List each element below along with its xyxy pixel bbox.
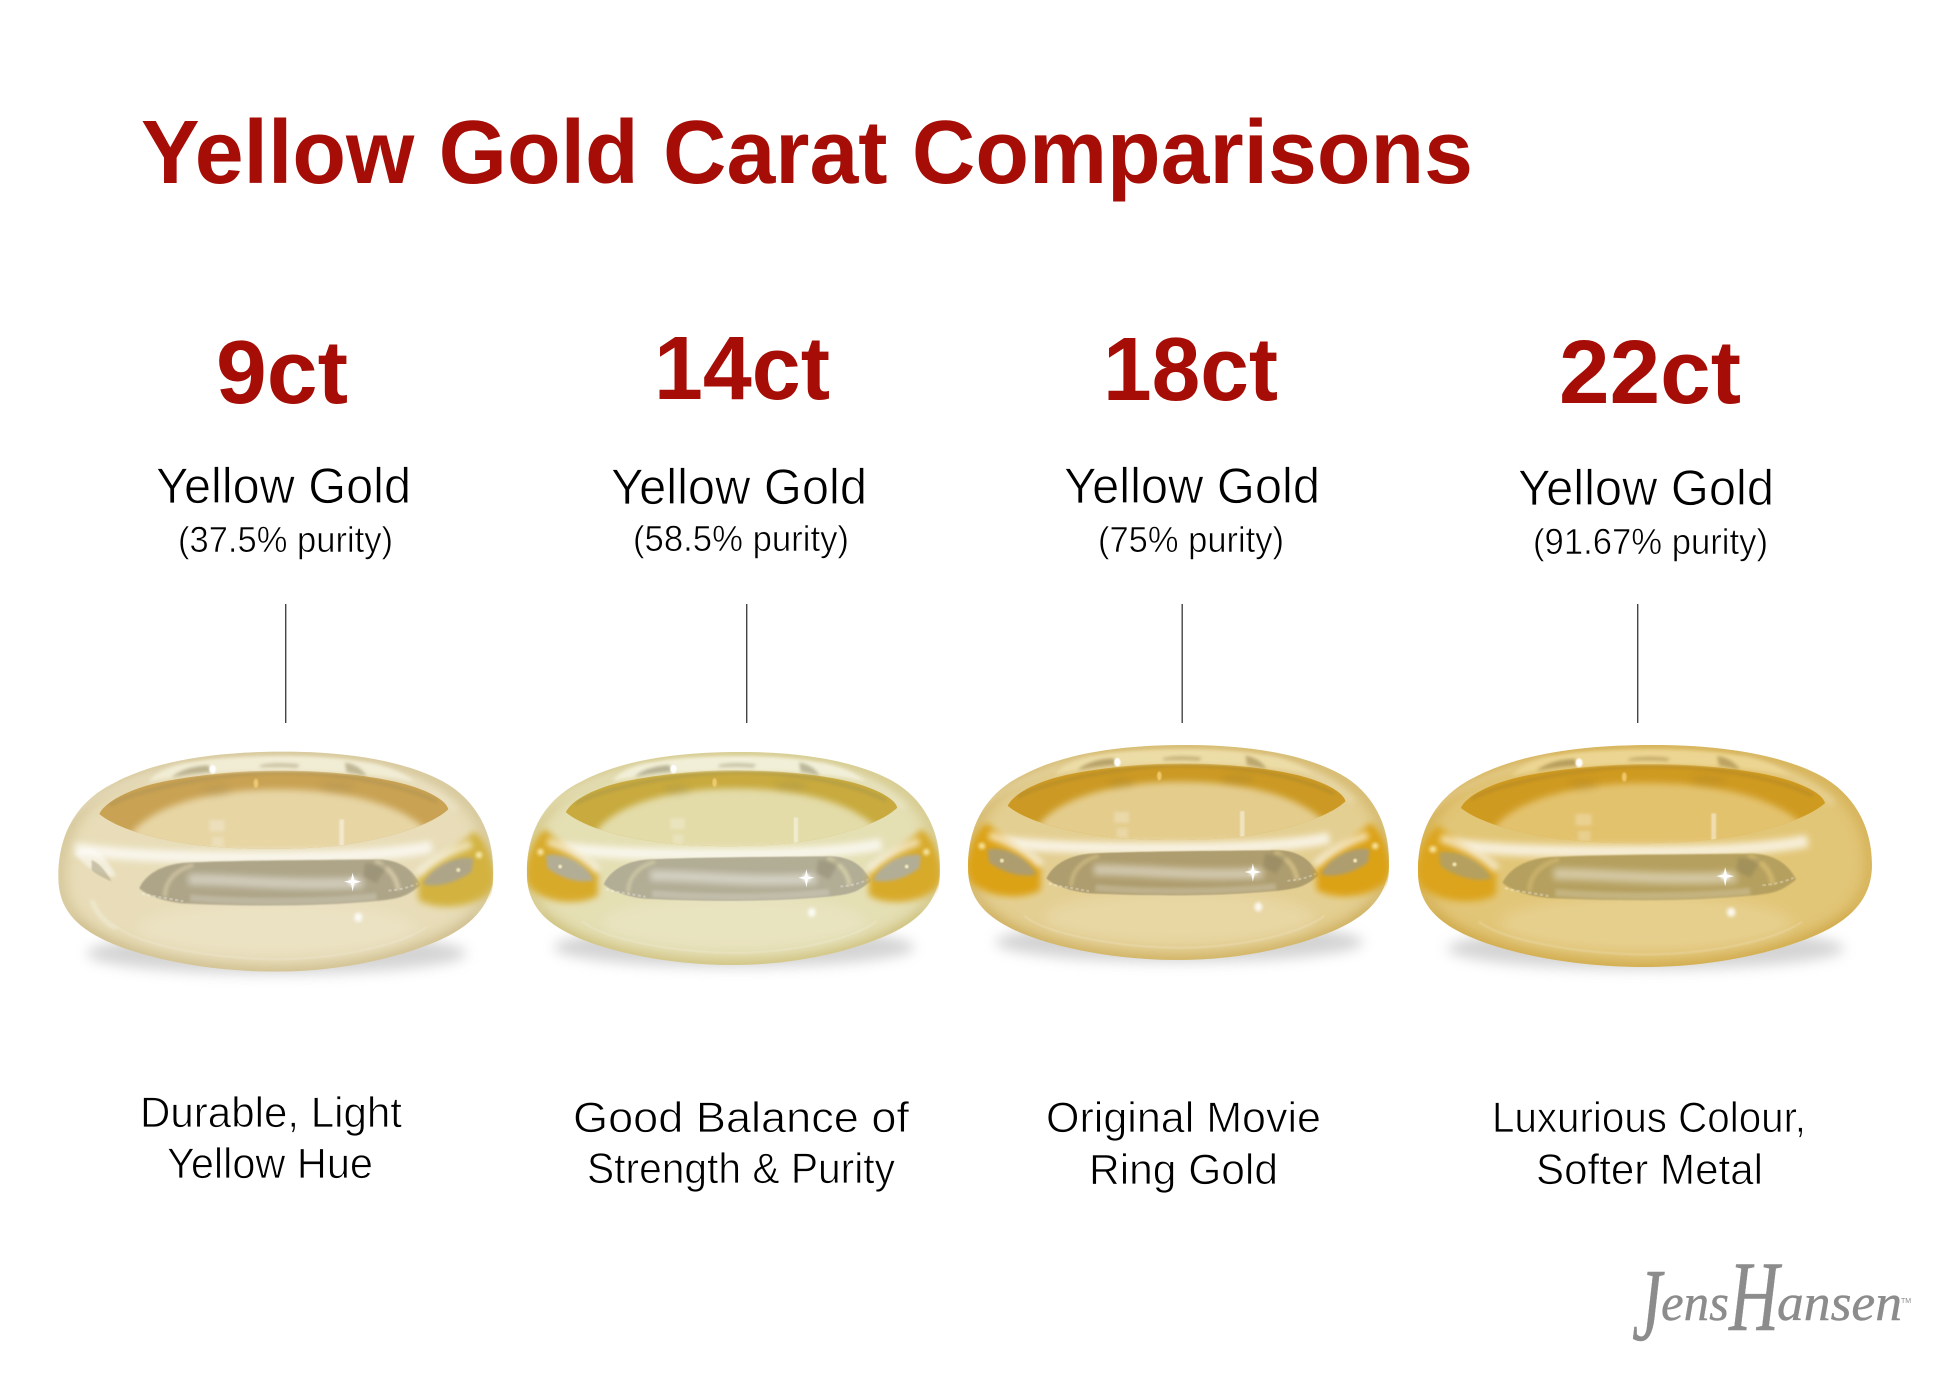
connector line — [285, 604, 286, 723]
panel: 18ct — [966, 320, 1391, 1194]
description: original movie — [1046, 1094, 1321, 1194]
description: durable: Yellow Hue — [167, 1140, 373, 1188]
label: yellow gold: Yellow Gold — [156, 458, 411, 514]
heading: 22ct: 22ct — [1559, 323, 1741, 423]
logo: Jens Hansen: J — [1632, 1248, 1665, 1363]
label: yellow gold: Yellow Gold — [611, 459, 867, 515]
logo: Jens Hansen: TM — [1901, 1298, 1911, 1305]
logo: Jens Hansen: H — [1728, 1241, 1782, 1352]
description: durable — [140, 1089, 402, 1188]
description: original movie: Ring Gold — [1089, 1146, 1278, 1194]
ring: 9ct gold — [57, 752, 495, 975]
logo: Jens Hansen: ansen — [1777, 1275, 1902, 1332]
heading: 14ct: 14ct — [654, 319, 830, 419]
label: yellow gold: Yellow Gold — [1064, 458, 1320, 514]
description: good balance: Good Balance of — [573, 1094, 910, 1142]
panel: 14ct — [525, 319, 942, 1193]
purity: 58.5%: (58.5% purity) — [633, 518, 849, 559]
connector line — [1182, 604, 1183, 723]
connector line — [746, 604, 747, 723]
description: good balance — [573, 1094, 910, 1193]
description: luxurious colour — [1492, 1094, 1806, 1194]
title: Yellow Gold Carat Comparisons — [141, 103, 1473, 203]
purity: 75%: (75% purity) — [1098, 519, 1284, 560]
purity: 91.67%: (91.67% purity) — [1533, 521, 1768, 562]
panel: 22ct — [1416, 323, 1874, 1194]
ring: 14ct gold — [525, 752, 942, 968]
connector line — [1637, 604, 1638, 723]
heading: 9ct: 9ct — [216, 323, 348, 423]
description: original movie: Original Movie — [1046, 1094, 1321, 1142]
purity: 37.5%: (37.5% purity) — [178, 519, 393, 560]
label: yellow gold: Yellow Gold — [1518, 460, 1774, 516]
logo: Jens Hansen — [1632, 1241, 1911, 1363]
description: good balance: Strength & Purity — [587, 1145, 895, 1193]
description: luxurious colour: Luxurious Colour, — [1492, 1094, 1806, 1142]
panel: 9ct — [57, 323, 495, 1188]
description: luxurious colour: Softer Metal — [1536, 1146, 1763, 1194]
ring: 22ct gold — [1416, 745, 1874, 970]
logo: Jens Hansen: ens — [1661, 1275, 1729, 1332]
ring: 18ct gold — [966, 745, 1391, 963]
description: durable: Durable, Light — [140, 1089, 402, 1137]
heading: 18ct: 18ct — [1103, 320, 1278, 420]
